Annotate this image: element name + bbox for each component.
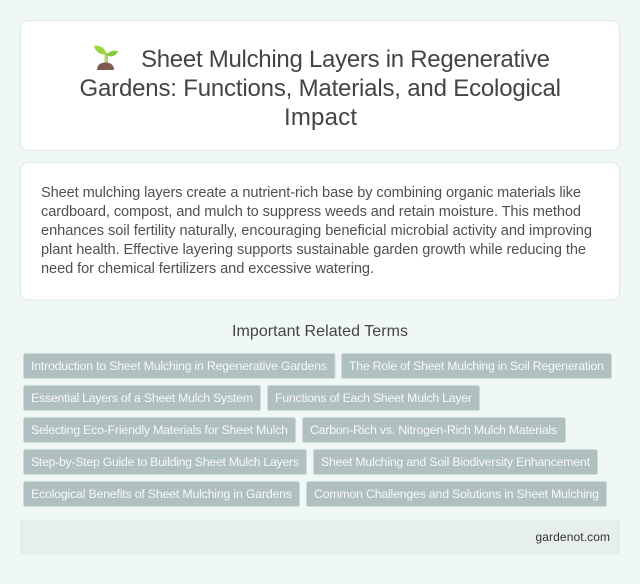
icon: seedling — [94, 46, 118, 70]
chip: eco-friendly materials — [24, 418, 296, 442]
chip: step-by-step guide: Step-by-Step Guide to Building Sheet Mulch Layers — [31, 455, 299, 469]
chip: ecological benefits: Ecological Benefits of Sheet Mulching in Gardens — [31, 487, 292, 501]
description text: need for chemical fertilizers and excessive watering. — [41, 261, 374, 277]
chip: soil biodiversity: Sheet Mulching and Soil Biodiversity Enhancement — [321, 455, 591, 469]
chip: role in soil regeneration: The Role of Sheet Mulching in Soil Regeneration — [349, 359, 604, 373]
title text — [80, 46, 561, 131]
panel: description — [20, 162, 620, 300]
description text: plant health. Effective layering supports sustainable garden growth while reducing the — [41, 242, 586, 258]
chip: essential layers: Essential Layers of a Sheet Mulch System — [31, 391, 253, 405]
title text: Impact — [284, 104, 357, 131]
chip: ecological benefits — [24, 482, 300, 506]
description text: cardboard, compost, and mulch to suppress weeds and retain moisture. This method — [41, 204, 581, 220]
description text: enhances soil fertility naturally, encouraging beneficial microbial activity and improving — [41, 223, 592, 239]
chip: role in soil regeneration — [342, 354, 612, 378]
chip: common challenges — [306, 482, 606, 506]
chip: soil biodiversity — [314, 450, 598, 474]
chip: functions of each layer — [268, 386, 480, 410]
chip: introduction — [24, 354, 335, 378]
heading: related terms: Important Related Terms — [232, 323, 408, 340]
chip: essential layers — [24, 386, 260, 410]
footer source text: gardenot.com — [536, 530, 610, 544]
description text — [41, 185, 592, 277]
footer bar — [20, 520, 620, 554]
term chips — [24, 354, 612, 506]
chip: carbon vs nitrogen: Carbon-Rich vs. Nitrogen-Rich Mulch Materials — [310, 423, 557, 437]
title text: Sheet Mulching Layers in Regenerative — [141, 46, 550, 73]
panel: title card — [20, 20, 620, 150]
chip: functions of each layer: Functions of Each Sheet Mulch Layer — [275, 391, 472, 405]
chip: common challenges: Common Challenges and Solutions in Sheet Mulching — [314, 487, 599, 501]
title text: Gardens: Functions, Materials, and Ecological — [80, 75, 561, 102]
chip: introduction: Introduction to Sheet Mulching in Regenerative Gardens — [31, 359, 327, 373]
description text: Sheet mulching layers create a nutrient-rich base by combining organic materials like — [41, 185, 581, 201]
chip: step-by-step guide — [24, 450, 306, 474]
chip: eco-friendly materials: Selecting Eco-Friendly Materials for Sheet Mulch — [31, 423, 288, 437]
chip: carbon vs nitrogen — [302, 418, 566, 442]
